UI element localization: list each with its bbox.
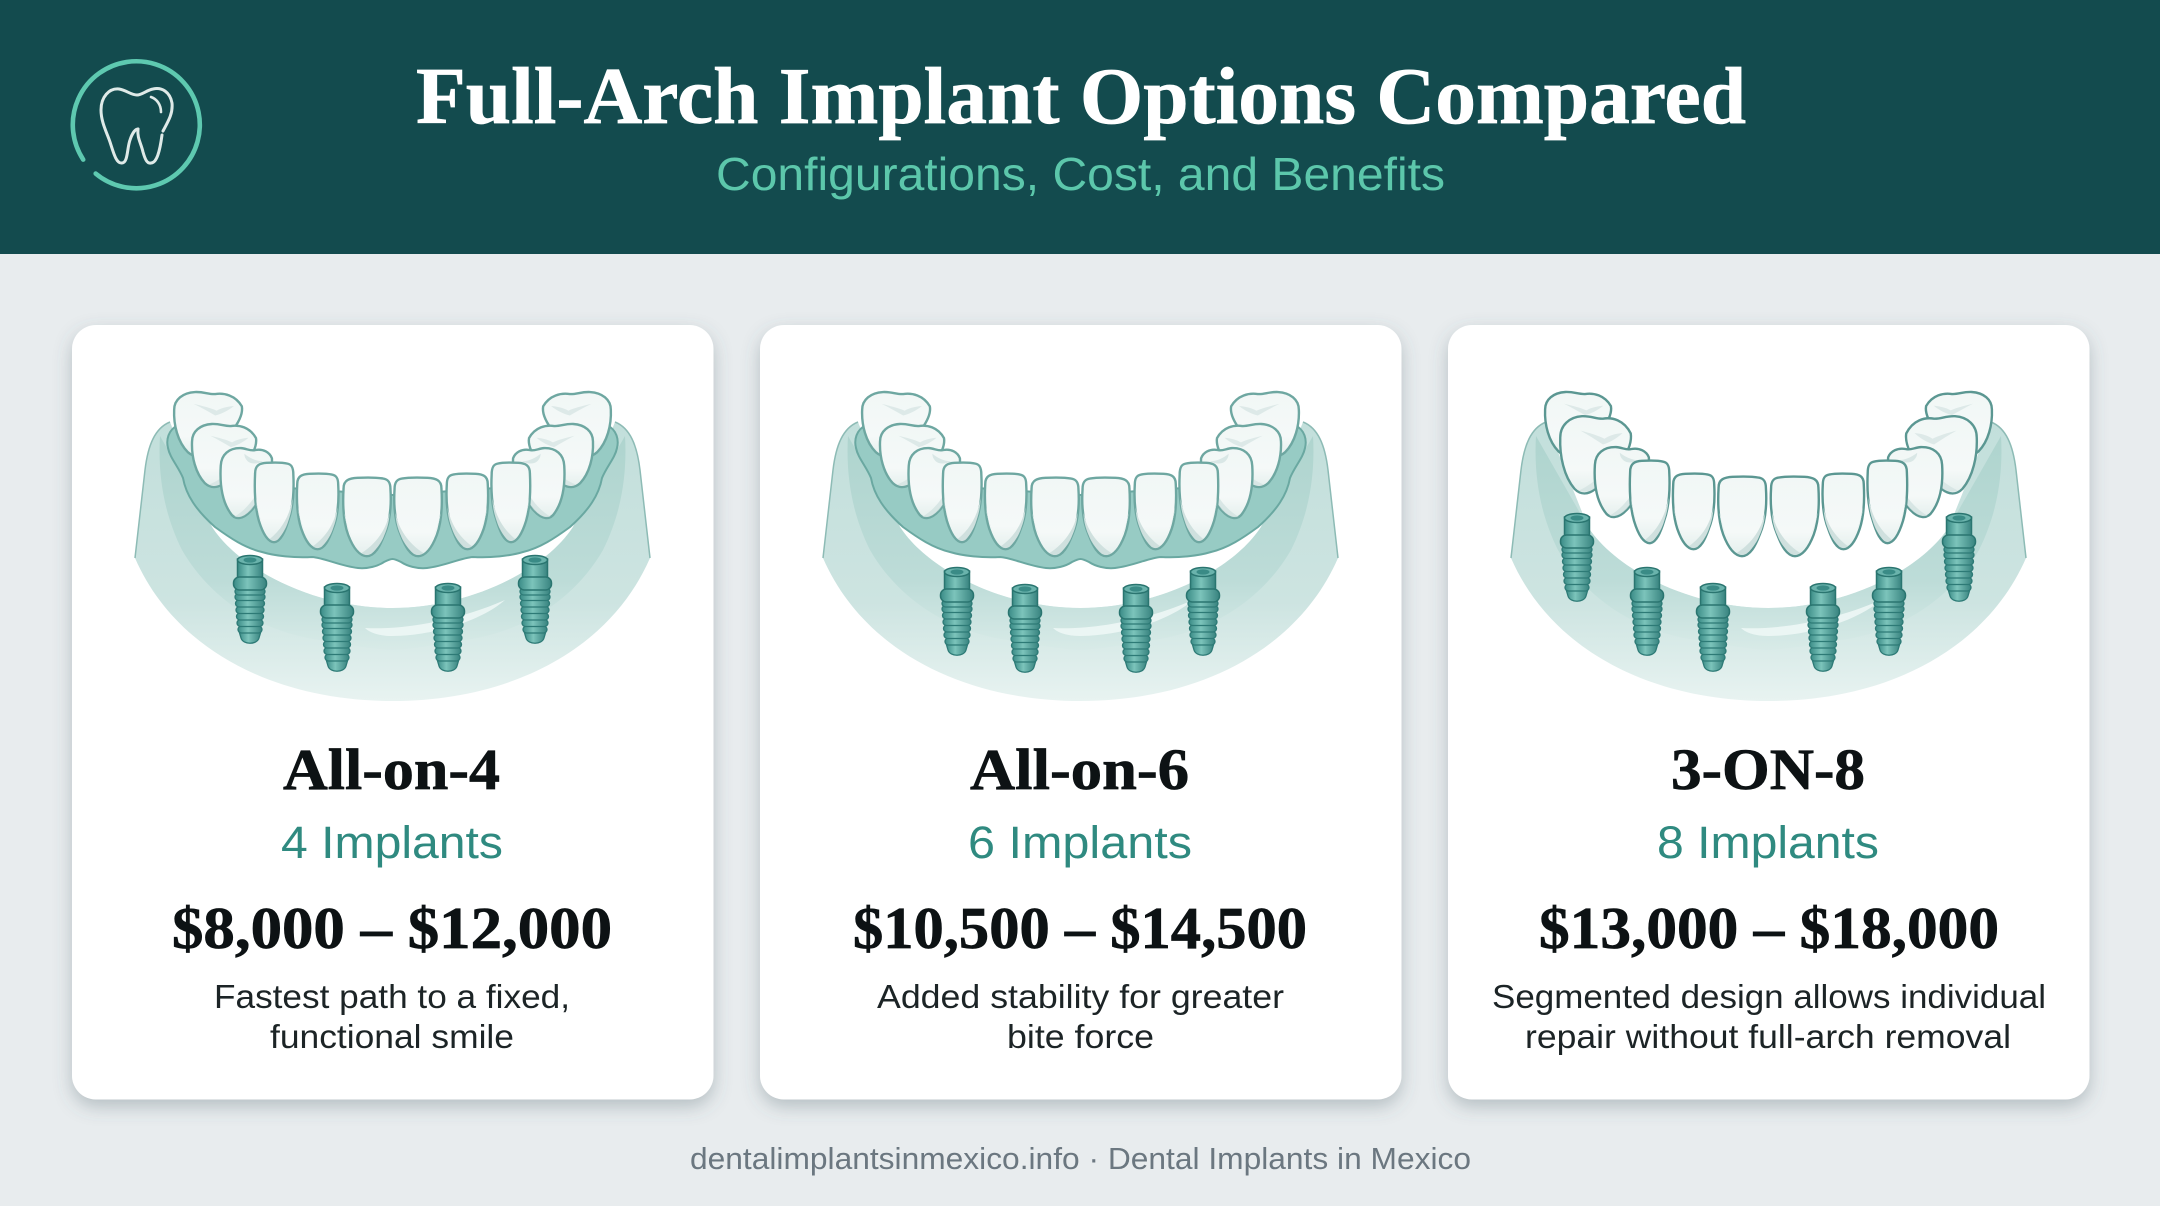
description: functional smile bbox=[270, 1018, 514, 1055]
implant count: 4 Implants bbox=[281, 817, 503, 868]
description: Fastest path to a fixed, bbox=[214, 978, 570, 1015]
heading: 3-ON-8: 3-ON-8 bbox=[1671, 737, 1865, 802]
description: repair without full-arch removal bbox=[1525, 1018, 2011, 1055]
illustration: 3-on-8 segmented arch with implants bbox=[1511, 392, 2026, 701]
price range: $8,000 – $12,000 bbox=[172, 895, 612, 961]
title: Full-Arch Implant Options Compared bbox=[416, 53, 1746, 141]
description: Added stability for greater bbox=[877, 978, 1284, 1015]
heading: All-on-4: All-on-4 bbox=[283, 737, 500, 802]
illustration: All-on-6 arch with implants bbox=[823, 392, 1338, 701]
description bbox=[214, 978, 570, 1055]
icon: tooth in circle bbox=[73, 61, 200, 188]
price range: $13,000 – $18,000 bbox=[1539, 895, 1999, 961]
subtitle: Configurations, Cost, and Benefits bbox=[716, 148, 1445, 200]
panel: 3-ON-8 bbox=[1448, 325, 2090, 1100]
description: Segmented design allows individual bbox=[1492, 978, 2046, 1015]
implant count: 8 Implants bbox=[1657, 817, 1879, 868]
panel: All-on-6 bbox=[760, 325, 1402, 1100]
illustration: All-on-4 arch with 4 implants bbox=[135, 392, 650, 701]
price range: $10,500 – $14,500 bbox=[853, 895, 1307, 961]
description bbox=[1492, 978, 2046, 1055]
description: bite force bbox=[1007, 1018, 1154, 1055]
heading: All-on-6: All-on-6 bbox=[970, 737, 1189, 802]
footer: dentalimplantsinmexico.info · Dental Implants in Mexico bbox=[690, 1141, 1471, 1176]
implant count: 6 Implants bbox=[968, 817, 1192, 868]
header banner bbox=[0, 0, 2160, 254]
panel: All-on-4 bbox=[72, 325, 714, 1100]
description bbox=[877, 978, 1284, 1055]
